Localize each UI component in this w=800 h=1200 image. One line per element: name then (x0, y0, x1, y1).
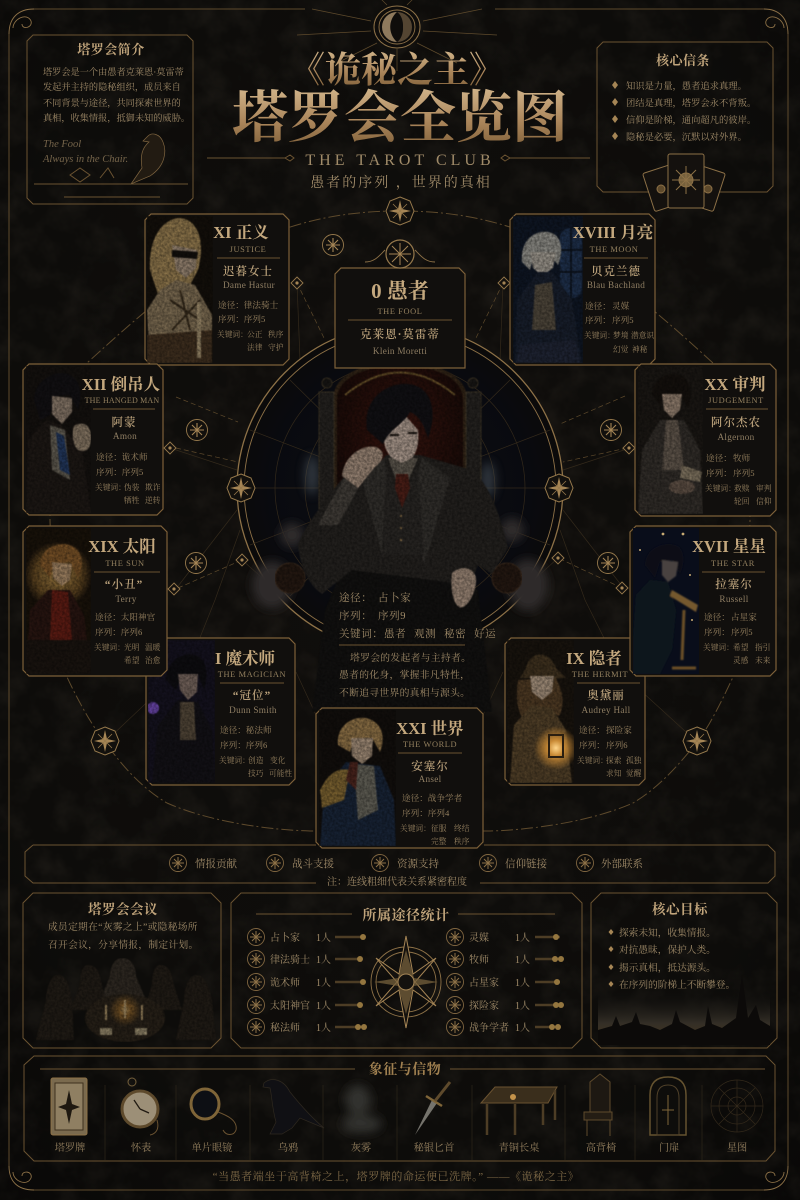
panel: intro (27, 35, 193, 204)
details: 信仰 (756, 496, 772, 506)
left path rows: 律法骑士 (270, 953, 310, 966)
right path rows: 1人 (515, 953, 530, 966)
card: XII hanged man (23, 364, 163, 515)
heading rule (40, 1068, 765, 1070)
main title: 塔罗会全览图 (232, 88, 568, 150)
heading: 象征与信物 (369, 1061, 441, 1078)
english name: Dunn Smith (229, 705, 277, 715)
details: 治愈 (145, 655, 161, 665)
portrait: amon (26, 366, 91, 513)
english: THE HERMIT (572, 670, 628, 679)
resting hand (451, 568, 476, 607)
left path rows: 1人 (316, 976, 331, 989)
details: 法律 (247, 342, 263, 352)
item labels: 星图 (727, 1142, 747, 1154)
card: XVII star (630, 526, 776, 676)
portrait: russell (633, 528, 699, 674)
details: 光明 (124, 642, 140, 652)
details: 救赎 (734, 483, 750, 493)
english name: Russell (719, 594, 749, 604)
icon: three tarot cards (643, 154, 725, 212)
details: 公正 (247, 330, 263, 339)
chart: outer orbit and connection lines (50, 197, 750, 831)
english: THE STAR (711, 559, 755, 568)
fool english name: Klein Moretti (373, 346, 427, 356)
fool details: 途径： (339, 591, 372, 604)
english title: THE TAROT CLUB (305, 152, 495, 169)
left path rows: 1人 (316, 931, 331, 944)
fool details: 关键词： (339, 627, 383, 640)
details: 未来 (755, 655, 771, 665)
fool description: 愚者的化身，掌握非凡特性， (339, 668, 470, 681)
right path rows: 1人 (515, 976, 530, 989)
details: 完整 (431, 836, 447, 846)
english: JUDGEMENT (708, 396, 764, 405)
details: 审判 (756, 483, 772, 493)
name: 安塞尔 (411, 759, 449, 773)
goals list: 对抗愚昧，保护人类。 (619, 943, 716, 956)
english name: Dame Hastur (223, 280, 275, 290)
icon: monocle (191, 1089, 236, 1134)
intro text: 不同背景与途径，共同探索世界的 (43, 97, 181, 109)
fool details: 观测 (414, 627, 436, 640)
illustration: dark city skyline (598, 975, 770, 1045)
portrait: dame hastur (147, 216, 213, 363)
closing quote: “当愚者端坐于高背椅之上，塔罗牌的命运便已洗牌。” ——《诡秘之主》 (213, 1169, 579, 1183)
goals list: 探索未知，收集情报。 (619, 926, 716, 939)
details: 灵媒 (612, 300, 630, 311)
english name: Terry (115, 594, 137, 604)
details: 探险家 (606, 724, 632, 735)
right path rows: 牧师 (469, 953, 489, 966)
icon: moon emblem (297, 0, 497, 71)
details: 占星家 (731, 611, 757, 622)
subtitle: 愚者的序列 ，世界的真相 (310, 174, 492, 191)
details: 技巧 (248, 768, 264, 778)
title (207, 50, 590, 191)
details: 求知 (606, 768, 622, 778)
heading: XXI 世界 (396, 719, 464, 738)
details: 终结 (454, 823, 470, 833)
portrait: ansel (319, 710, 396, 846)
beliefs heading: 核心信条 (656, 53, 710, 68)
card: XXI world (316, 708, 483, 848)
right path rows: 战争学者 (469, 1021, 509, 1034)
details: 序列5 (731, 626, 752, 637)
fool details: 占卜家 (378, 591, 411, 604)
head (384, 414, 418, 463)
icon: raven (131, 134, 165, 184)
details: 温暖 (145, 642, 161, 652)
right path rows: 1人 (515, 931, 530, 944)
details: 伪装 (124, 482, 140, 492)
trousers (312, 560, 492, 712)
legend labels: 资源支持 (397, 857, 439, 870)
legend note: 注：连线粗细代表关系紧密程度 (327, 875, 467, 888)
heading: XVII 星星 (692, 537, 766, 556)
fool description: 塔罗会的发起者与主持者。 (350, 651, 471, 664)
details: 逆转 (145, 495, 161, 505)
portrait: audrey hall (507, 640, 578, 783)
details: 序列5 (612, 314, 634, 325)
card: IX hermit (505, 638, 645, 785)
details: 途径：秘法师 (220, 724, 272, 735)
details: 欺诈 (145, 482, 161, 492)
ground line (34, 168, 188, 197)
fool english: THE FOOL (377, 307, 423, 316)
english name: Amon (113, 431, 137, 441)
name: 奥黛丽 (587, 688, 625, 702)
fool name: 克莱恩·莫雷蒂 (360, 327, 440, 341)
details: 幻觉 (613, 344, 629, 354)
fool details: 序列： (339, 609, 372, 622)
details: 轮回 (734, 496, 750, 506)
intro text: 真相，收集情报，抵御未知的威胁。 (43, 112, 190, 124)
name: 贝克兰德 (591, 264, 641, 278)
english name: Ansel (419, 774, 442, 784)
card: I magician (146, 638, 295, 785)
details: 可能性 (269, 768, 292, 778)
details: 序列：序列4 (402, 807, 450, 818)
fool description: 不断追寻世界的真相与源头。 (339, 686, 470, 699)
heading: IX 隐者 (566, 648, 622, 668)
illustration: meeting around table (36, 958, 216, 1042)
details: 潜意识 (631, 330, 654, 340)
heading: XII 倒吊人 (82, 375, 161, 394)
details: 神秘 (632, 344, 648, 354)
panel: core beliefs (597, 42, 773, 212)
details: 序列：序列6 (220, 739, 268, 750)
fool details (339, 591, 496, 699)
legend icons (170, 854, 594, 872)
heading: XI 正义 (213, 223, 269, 242)
details: 灵感 (733, 655, 749, 665)
motto: The Fool (43, 139, 81, 150)
details: 序列： (585, 314, 611, 325)
name: 迟暮女士 (223, 264, 273, 278)
bullets (608, 929, 614, 987)
right path rows: 探险家 (469, 999, 499, 1012)
icon: bronze table (481, 1087, 557, 1135)
vest and shirt (382, 468, 424, 555)
heading: XVIII 月亮 (573, 222, 653, 242)
icon: tarot card (51, 1078, 87, 1135)
details: 牺牲 (124, 495, 140, 505)
details: 关键词： (584, 330, 615, 340)
fool details: 秘密 (444, 627, 466, 640)
smoke (252, 518, 548, 611)
details: 途径：战争学者 (402, 792, 463, 803)
name: “小丑” (105, 577, 143, 591)
english name: Algernon (717, 432, 755, 442)
item dividers (105, 1085, 702, 1160)
fool details: 愚者 (384, 627, 406, 640)
details: 关键词： (95, 482, 126, 492)
details: 途径： (706, 452, 732, 463)
english: THE MOON (590, 245, 638, 254)
portrait: blau bachland (513, 216, 583, 363)
icon: high-backed chair (584, 1074, 612, 1136)
portrait: algernon (638, 366, 703, 514)
fool heading: 0 愚者 (371, 279, 429, 303)
details: 创造 (248, 755, 264, 765)
coat (298, 455, 508, 594)
legend labels: 战斗支援 (292, 857, 334, 870)
bullets (612, 81, 618, 140)
details: 序列：序列5 (218, 313, 265, 324)
heading: XIX 太阳 (88, 537, 156, 556)
details: 变化 (270, 755, 286, 765)
panel: tarot meeting (23, 893, 221, 1048)
raised hand and arm (318, 478, 358, 525)
fool details: 好运 (474, 627, 496, 640)
card: XVIII moon (510, 214, 655, 365)
name: 阿尔杰农 (711, 415, 761, 429)
details: 序列：序列6 (95, 626, 143, 637)
english name: Blau Bachland (587, 280, 645, 290)
left path rows: 1人 (316, 1021, 331, 1034)
details: 序列： (579, 739, 605, 750)
intro text: 塔罗会是一个由愚者克莱恩·莫雷蒂 (43, 66, 184, 77)
icon: dagger (415, 1082, 450, 1135)
item labels: 塔罗牌 (55, 1141, 85, 1154)
panel: the fool text card (335, 240, 465, 368)
heading: 塔罗会会议 (88, 901, 158, 917)
icon: doorway (650, 1077, 686, 1135)
panel: central astrolabe (227, 325, 573, 651)
english: THE MAGICIAN (218, 670, 286, 679)
card: XI justice (145, 214, 289, 365)
card: XIX sun (23, 526, 167, 676)
beliefs list: 知识是力量，愚者追求真理。 (626, 80, 747, 92)
left path rows: 1人 (316, 953, 331, 966)
right path rows: 灵媒 (469, 931, 489, 944)
details: 序列：序列5 (96, 466, 143, 477)
details: 序列6 (606, 739, 628, 750)
right path rows: 1人 (515, 999, 530, 1012)
english: THE WORLD (403, 740, 457, 749)
details: 途径：律法骑士 (218, 299, 279, 310)
illustration: the fool on the throne (275, 362, 522, 712)
right path rows: 占星家 (469, 976, 499, 989)
english: JUSTICE (230, 245, 266, 254)
fool details: 序列9 (378, 609, 406, 622)
crown ornament (365, 240, 435, 268)
left path rows: 太阳神官 (270, 999, 310, 1012)
beliefs list: 团结是真理，塔罗会永不背叛。 (626, 97, 756, 109)
details: 指引 (755, 642, 770, 652)
item labels: 单片眼镜 (192, 1141, 232, 1154)
title: 《诡秘之主》 (289, 50, 505, 90)
left path rows (248, 928, 367, 1036)
english: THE SUN (105, 559, 145, 568)
item labels: 青铜长桌 (499, 1141, 539, 1154)
left path rows: 占卜家 (270, 931, 300, 944)
details: 关键词： (703, 642, 734, 652)
coat lapels (362, 458, 450, 565)
item labels: 门扉 (659, 1141, 679, 1154)
english name: Audrey Hall (582, 705, 631, 715)
details: 秩序 (454, 836, 470, 846)
star medallions (91, 197, 711, 755)
item labels: 灰雾 (351, 1141, 371, 1154)
details: 序列5 (733, 467, 754, 478)
details: 探索 (606, 755, 622, 765)
details: 序列： (704, 626, 730, 637)
heading: 所属途径统计 (362, 907, 450, 924)
portrait: dunn smith (147, 640, 215, 783)
connection nodes (164, 234, 635, 595)
details: 牧师 (733, 452, 751, 463)
beliefs list: 隐秘是必要，沉默以对外界。 (626, 131, 747, 143)
details: 途径： (579, 724, 605, 735)
item labels: 怀表 (131, 1141, 151, 1154)
goals list: 揭示真相，抵达源头。 (619, 961, 716, 974)
details: 途径： (704, 611, 730, 622)
heading rules (256, 913, 555, 915)
compass rose (371, 936, 441, 1028)
details: 关键词： (577, 755, 608, 765)
legend labels: 外部联系 (601, 857, 643, 870)
panel: symbols and relics (24, 1056, 775, 1161)
details: 希望 (124, 655, 140, 665)
text: 成员定期在“灰雾之上”或隐秘场所 (48, 920, 198, 933)
left path rows: 秘法师 (270, 1021, 300, 1034)
title ornaments (207, 155, 590, 161)
card: XX judgement (635, 364, 776, 516)
left path rows: 1人 (316, 999, 331, 1012)
details: 秩序 (268, 329, 284, 339)
legend labels: 情报贡献 (195, 857, 237, 870)
item labels: 乌鸦 (278, 1141, 298, 1154)
details: 孤独 (626, 755, 642, 765)
details: 途径：诡术师 (96, 451, 148, 462)
details: 途径： (585, 300, 611, 311)
icon: grey fog (342, 1085, 382, 1133)
motto: Always in the Chair. (42, 154, 128, 165)
intro heading: 塔罗会简介 (77, 42, 145, 57)
legend labels: 信仰链接 (505, 857, 547, 870)
panel: core goals (591, 893, 777, 1048)
name: “冠位” (233, 688, 271, 702)
panel: relationship legend (25, 845, 775, 888)
details: 途径：太阳神官 (95, 611, 156, 622)
panel: path statistics (231, 893, 582, 1048)
details: 希望 (733, 642, 749, 652)
details: 梦境 (613, 330, 629, 340)
beliefs list: 信仰是阶梯，通向超凡的彼岸。 (626, 114, 756, 126)
details: 关键词： (400, 823, 431, 833)
moonlight behind throne (305, 455, 495, 498)
details: 征服 (431, 823, 447, 833)
armrests (275, 563, 522, 593)
fool divider (348, 319, 452, 321)
details: 序列： (706, 467, 732, 478)
details: 守护 (268, 342, 284, 352)
heading: I 魔术师 (215, 648, 276, 668)
name: 阿蒙 (112, 415, 136, 429)
icon: raven (263, 1080, 324, 1134)
details: 关键词： (705, 483, 736, 493)
heading: XX 审判 (705, 375, 765, 394)
right path rows (446, 928, 564, 1036)
portrait: terry (24, 528, 92, 674)
item labels: 秘银匕首 (414, 1141, 454, 1154)
icon: star chart (711, 1080, 763, 1132)
details: 关键词： (219, 755, 250, 765)
name: 拉塞尔 (715, 577, 753, 591)
details: 关键词： (217, 329, 248, 339)
icon: pocket watch (122, 1078, 158, 1135)
text: 召开会议，分享情报，制定计划。 (48, 938, 199, 951)
details: 觉醒 (626, 768, 642, 778)
intro text: 发起并主持的隐秘组织，成员来自 (43, 81, 181, 93)
details: 关键词： (94, 642, 125, 652)
goals list: 在序列的阶梯上不断攀登。 (619, 978, 735, 991)
english: THE HANGED MAN (85, 396, 159, 405)
right path rows: 1人 (515, 1021, 530, 1034)
heading: 核心目标 (652, 901, 709, 917)
star medallions on ring (227, 474, 573, 502)
item labels: 高背椅 (586, 1141, 616, 1154)
left path rows: 诡术师 (270, 976, 300, 989)
